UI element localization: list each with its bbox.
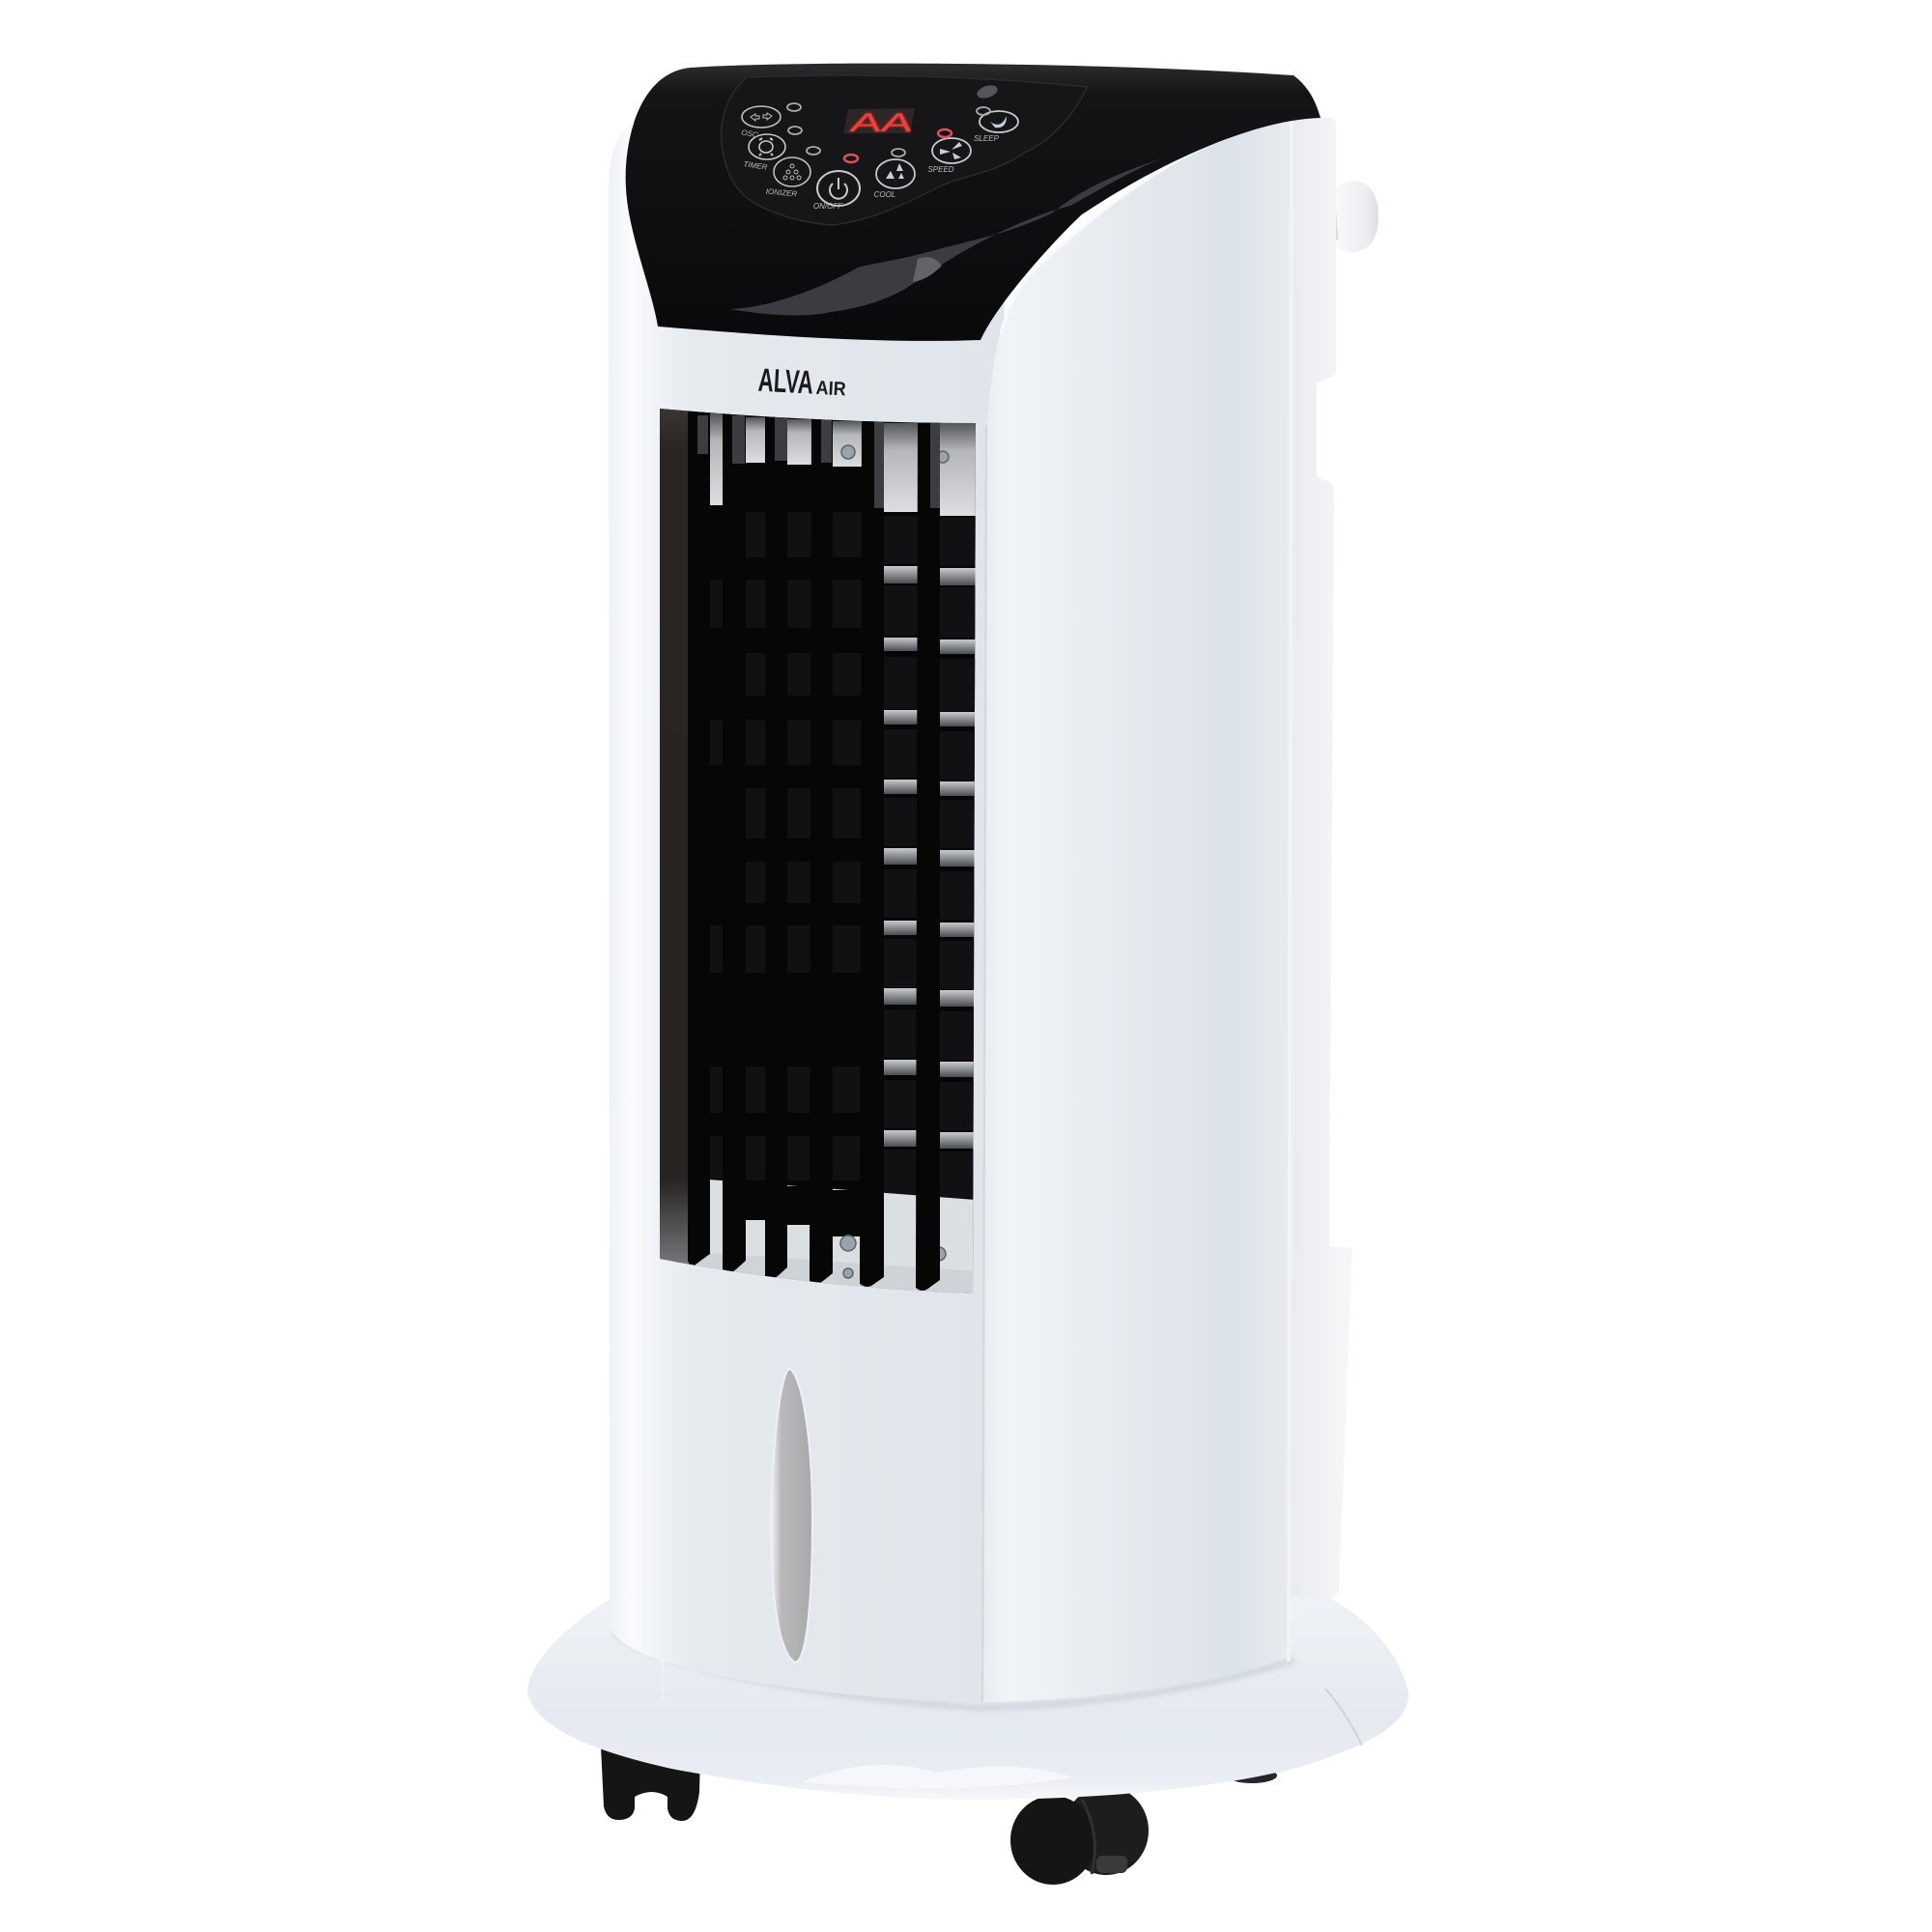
button: ionizer [774,157,810,186]
screws [840,445,949,1278]
left side and front face [609,114,1005,1702]
black control head [626,64,1321,341]
remote sensor [976,83,999,100]
ALVA AIR logo: AIR [815,378,847,400]
right curved side panel [984,120,1298,1702]
LED display [843,107,918,137]
water level window [771,1369,812,1662]
thin vertical glints [697,727,937,1196]
button: timer [749,134,785,159]
bright band reflections [884,566,976,1149]
button labels: COOL [874,190,895,199]
button labels: SLEEP [974,134,1000,143]
upper openings [710,413,976,516]
lower dark blocks [746,1180,862,1236]
button labels: TIMER [743,159,768,172]
button labels: ON/OFF [813,202,843,211]
rear caster wheel [1227,1768,1277,1783]
left inner wall [660,406,689,1265]
button: fan speed [932,138,971,163]
button: cool [876,159,915,188]
vertical louvre slats [688,406,940,1291]
left caster wheel [601,1747,700,1821]
product illustration: air cooler [527,64,1408,1885]
right caster wheel [1010,1786,1149,1885]
button labels: IONIZER [765,187,798,198]
button: power [817,171,860,206]
cooler body shell [609,114,1298,1702]
button labels [741,128,1000,211]
glossy reflection swoosh [730,157,1165,315]
front air louvre grille [660,406,979,1299]
button labels: SPEED [927,165,954,174]
LED display: AA [848,107,918,137]
button labels: OSC [741,128,758,139]
rear water tank [1275,118,1352,1662]
button: oscillation [742,106,781,128]
dark louvre tiles [708,512,976,1198]
indicator lights [787,103,990,162]
LED display: AA [848,107,918,137]
button: sleep [980,111,1018,132]
round base [527,1596,1408,1800]
control panel face [722,75,1087,225]
water tank knob [1333,181,1378,252]
ALVA AIR logo: ALVA [757,362,814,402]
lower opening [696,1179,976,1299]
panel seam [982,425,986,1702]
